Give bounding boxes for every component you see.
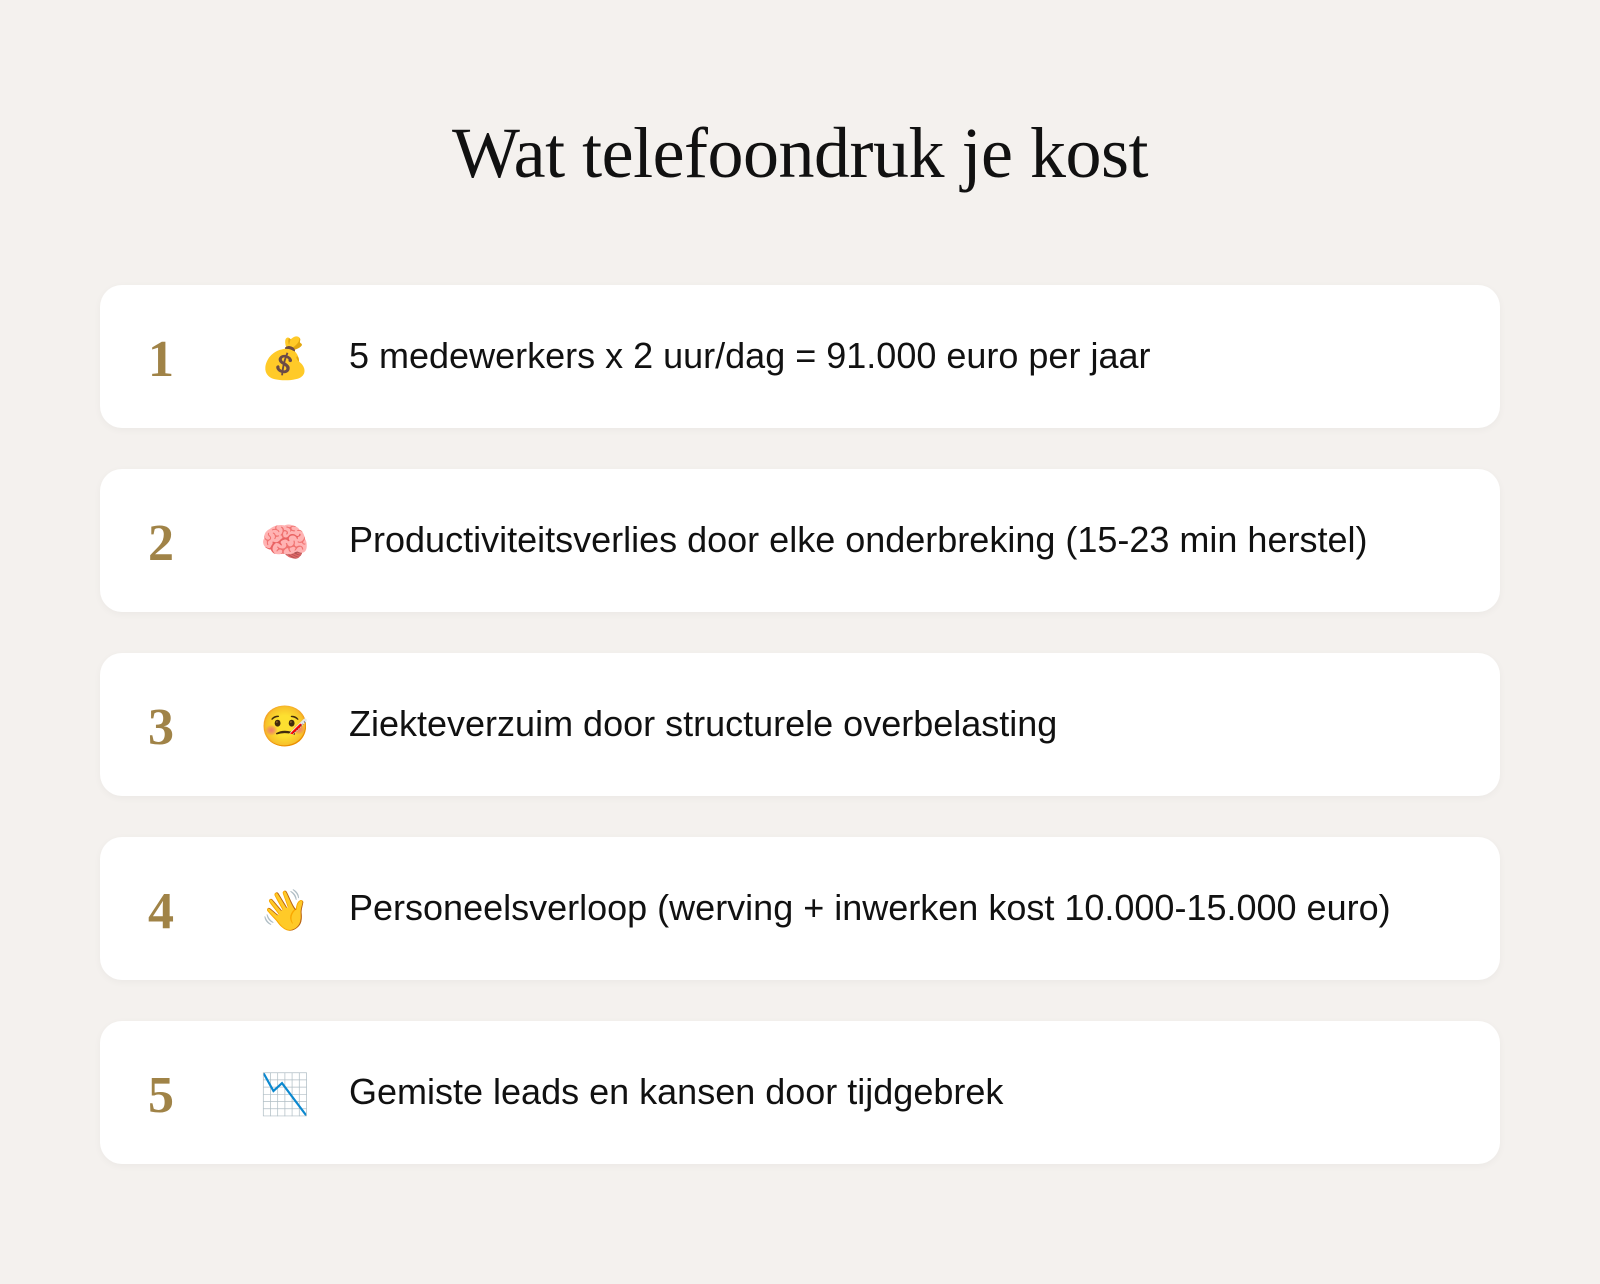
text 4: Personeelsverloop (werving + inwerken kost 10.000-15.000 euro)	[349, 887, 1391, 928]
text 1: 5 medewerkers x 2 uur/dag = 91.000 euro per jaar	[349, 335, 1150, 376]
text 5: Gemiste leads en kansen door tijdgebrek	[349, 1071, 1003, 1112]
icon: chart decreasing: 📉	[260, 1071, 310, 1118]
number 3: 3	[148, 699, 174, 756]
number 4: 4	[148, 883, 174, 940]
icon: sick face: 🤒	[260, 703, 310, 750]
title: Wat telefoondruk je kost	[452, 113, 1148, 193]
text 2: Productiviteitsverlies door elke onderbreking (15-23 min herstel)	[349, 519, 1367, 560]
number 2: 2	[148, 515, 174, 572]
card 2	[100, 469, 1500, 612]
icon: money bag: 💰	[260, 335, 310, 382]
number 5: 5	[148, 1067, 174, 1124]
icon: brain: 🧠	[260, 519, 310, 566]
card 5	[100, 1021, 1500, 1164]
card 1	[100, 285, 1500, 428]
text 3: Ziekteverzuim door structurele overbelasting	[349, 703, 1057, 744]
card 3	[100, 653, 1500, 796]
card 4	[100, 837, 1500, 980]
icon: waving hand: 👋	[260, 887, 310, 934]
number 1: 1	[148, 331, 174, 388]
